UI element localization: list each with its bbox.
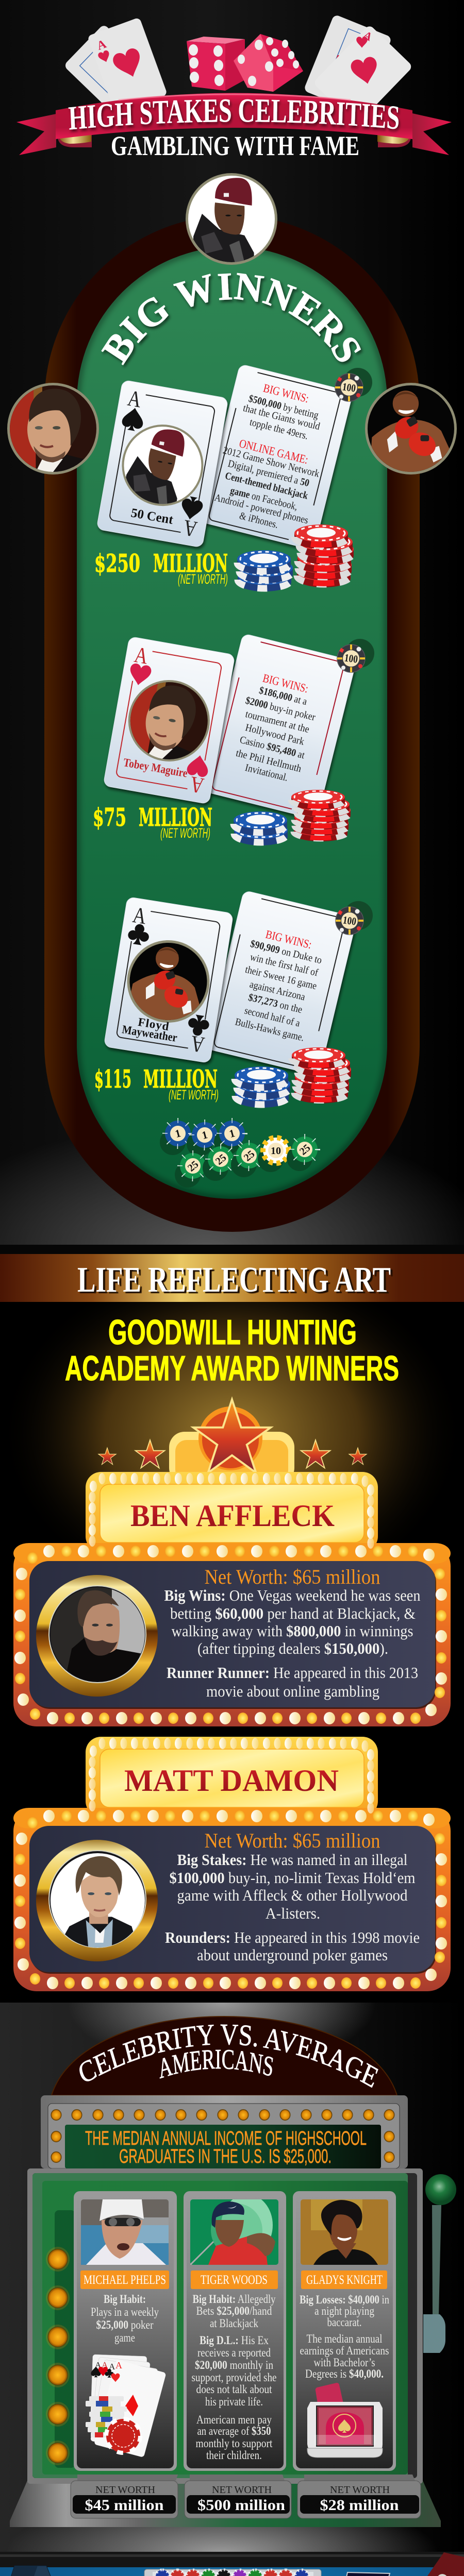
- body text: (after tipping dealers $150,000).: [197, 1639, 388, 1657]
- text: earnings of Americans: [300, 2344, 389, 2357]
- machine base: [10, 2481, 441, 2527]
- card: info: [201, 364, 372, 550]
- card: info: $37,273 on the: [247, 992, 304, 1015]
- plate: Knight net worth: $28 million: [320, 2497, 399, 2514]
- text: Big D.L.: His Ex: [200, 2334, 269, 2347]
- text: with Bachelor’s: [313, 2356, 375, 2369]
- body text: A-listers.: [266, 1904, 320, 1922]
- plate: Woods net worth: [185, 2481, 291, 2518]
- photo: Tiger Woods: [190, 2199, 278, 2265]
- text: his private life.: [205, 2395, 263, 2408]
- title: HIGH STAKES CELEBRITIES: [68, 99, 401, 134]
- body text: game with Affleck & other Hollywood: [177, 1886, 408, 1904]
- text: receives a reported: [197, 2346, 271, 2359]
- card: ace of hearts: A: [188, 771, 206, 799]
- net worth plates: [71, 2475, 421, 2518]
- banner ribbon: [16, 93, 452, 155]
- card: info: $2000 buy-in poker: [244, 695, 317, 723]
- text: $25,000 poker: [96, 2318, 154, 2331]
- portrait: Ben Affleck: [51, 1587, 145, 1682]
- panel: 50 Cent cards: [94, 364, 372, 591]
- chip stacks: [237, 524, 354, 591]
- icon: discard holder: [3, 2566, 61, 2576]
- text: Plays in a weekly: [91, 2306, 159, 2318]
- name: [191, 2270, 278, 2289]
- card: info: the Phil Hellmuth: [235, 748, 303, 774]
- body text: [164, 1586, 421, 1700]
- text: Bets $25,000/hand: [196, 2304, 272, 2317]
- card: info: topple the 49ers.: [248, 416, 309, 442]
- card: ace of clubs: Mayweather: [121, 1023, 178, 1044]
- card: ace of spades: A: [126, 385, 143, 413]
- card: ace of clubs: Floyd: [137, 1015, 170, 1033]
- card: ace of clubs: A: [131, 902, 148, 929]
- chip: 100: [337, 639, 374, 672]
- body text: [165, 1851, 420, 1964]
- heading: Celebrity vs. Average Americans: CELEBRITY VS. AVERAGE: [79, 2024, 378, 2088]
- net worth: $115 million: MILLION: [143, 1065, 218, 1094]
- card: info: BIG WINS:: [262, 381, 310, 405]
- photo: Michael Phelps: [81, 2199, 169, 2265]
- text: [300, 2293, 389, 2380]
- text: an average of $350: [197, 2425, 271, 2437]
- sign: table limits: [338, 2572, 390, 2576]
- card: info: Digital, premiered a 50: [227, 458, 310, 489]
- plate: Knight net worth: [297, 2481, 421, 2518]
- plate: Phelps net worth: [71, 2481, 178, 2518]
- net worth: $75 million: $75: [93, 803, 126, 832]
- card: info: Cent-themed blackjack: [224, 470, 309, 502]
- card: info: against Arizona: [248, 978, 306, 1003]
- icon: left playing cards: [63, 17, 168, 123]
- chip stacks: [235, 1047, 351, 1108]
- machine top: [41, 2095, 408, 2168]
- card: info: 2012 Game Show Network: [222, 445, 321, 480]
- icon: right playing cards: [303, 14, 413, 125]
- card: info: [206, 890, 373, 1076]
- heading: Goodwill Hunting: GOODWILL HUNTING: [108, 1313, 357, 1352]
- body text: walking away with $800,000 in winnings: [171, 1622, 413, 1640]
- icon: big star: [193, 1399, 271, 1473]
- plate: Phelps net worth: $45 million: [85, 2497, 164, 2514]
- band: Life Reflecting Art: [0, 1254, 464, 1302]
- icon: cards and chips: A: [115, 2360, 122, 2370]
- body text: about underground poker games: [197, 1946, 388, 1964]
- text: does not talk about: [196, 2383, 272, 2396]
- heading: Celebrity vs. Average Americans: AMERICANS: [160, 2049, 273, 2079]
- card: info: Invitational.: [244, 762, 289, 784]
- body text: $100,000 buy-in, no-limit Texas Hold‘em: [169, 1869, 416, 1887]
- card: info: BIG WINS:: [261, 671, 310, 696]
- body text: Runner Runner: He appeared in this 2013: [167, 1664, 418, 1682]
- background: casino table: [0, 2552, 464, 2576]
- icon: cards and chips: A: [109, 2362, 115, 2371]
- icon: right playing cards: A: [361, 28, 375, 43]
- net worth: $75 million: (NET WORTH): [160, 825, 210, 841]
- net worth: $115 million: (NET WORTH): [169, 1087, 219, 1103]
- text: support, provided she: [192, 2371, 276, 2384]
- text: The median annual: [306, 2332, 383, 2345]
- card: info: game on Facebook,: [229, 485, 299, 513]
- card: ace of hearts: A: [132, 642, 150, 669]
- icon: left playing cards: A: [95, 37, 108, 53]
- card: info: [204, 633, 374, 820]
- net worth: $115 million: [94, 1065, 219, 1103]
- name: GLADYS KNIGHT: [306, 2273, 383, 2287]
- card: ace of clubs: [104, 897, 234, 1063]
- body text: Big Wins: One Vegas weekend he was seen: [164, 1586, 421, 1604]
- portrait: Matt Damon: [51, 1853, 145, 1947]
- card: info: win the first half of: [249, 952, 319, 979]
- text: [192, 2293, 276, 2462]
- text: Big Habit: Allegedly: [193, 2293, 276, 2306]
- chip: 100: [336, 901, 373, 935]
- body text: Rounders: He appeared in this 1998 movie: [165, 1928, 420, 1946]
- card: ace of spades: [96, 380, 228, 548]
- card: info: & iPhones.: [238, 510, 279, 531]
- chip columns: [156, 2570, 308, 2576]
- icon: small stars: [98, 1440, 367, 1468]
- portrait: Floyd Mayweather: [365, 383, 457, 474]
- icon: card box: [307, 2383, 383, 2458]
- plate: Knight net worth: NET WORTH: [330, 2484, 390, 2496]
- plate: Woods net worth: $500 million: [197, 2497, 285, 2514]
- name: MICHAEL PHELPS: [84, 2273, 166, 2287]
- name: MATT DAMON: [124, 1764, 339, 1798]
- panel: Ben Affleck marquee: [13, 1472, 451, 1726]
- card: ace of hearts: Tobey Maguire: [122, 756, 189, 780]
- text: monthly to support: [196, 2437, 273, 2450]
- text: a night playing: [314, 2304, 374, 2317]
- reel: Michael Phelps: [74, 2191, 177, 2471]
- panel: Tobey Maguire cards: [93, 633, 374, 845]
- text: at Blackjack: [210, 2317, 258, 2330]
- table chips: [160, 1121, 318, 1188]
- card: info: tournament at the: [244, 708, 310, 735]
- icon: pink dice: [187, 34, 303, 92]
- icon: cards and chips: A: [95, 2360, 102, 2370]
- reel: Gladys Knight: [293, 2191, 396, 2471]
- name: BEN AFFLECK: [130, 1499, 335, 1533]
- chip tray: [144, 2569, 321, 2576]
- card: info: their Sweet 16 game: [244, 964, 318, 992]
- card: ace of spades: A: [181, 515, 199, 542]
- panel: poker table: [44, 215, 420, 1232]
- net worth: Net Worth: $65 million: [204, 1829, 380, 1852]
- card: info: BIG WINS:: [264, 928, 313, 951]
- net worth: $250 million: (NET WORTH): [178, 571, 228, 587]
- portrait: Tobey Maguire: [7, 383, 99, 474]
- card: ace of clubs: A: [189, 1031, 206, 1058]
- text: Degrees is $40,000.: [305, 2367, 384, 2380]
- body text: movie about online gambling: [206, 1682, 379, 1700]
- arch: [52, 2016, 397, 2095]
- net worth: Net Worth: $65 million: [204, 1565, 380, 1588]
- name: [301, 2270, 387, 2289]
- chip: 100: [335, 368, 372, 401]
- heading: Big Winners: BIG WINNERS: [101, 273, 364, 368]
- text: Big Habit:: [104, 2293, 146, 2306]
- card: info: Android - powered phones: [213, 492, 310, 526]
- background: section two: [0, 1254, 464, 2003]
- card: info: that the Giants would: [242, 402, 321, 432]
- net worth: $250 million: $250: [94, 549, 140, 578]
- text: [91, 2293, 159, 2344]
- net worth: $250 million: [94, 549, 228, 587]
- card: info: Hollywood Park: [244, 722, 305, 748]
- background: section three: [0, 2003, 432, 2552]
- body text: Big Stakes: He was named in an illegal: [177, 1851, 407, 1869]
- body text: betting $60,000 per hand at Blackjack, &: [170, 1604, 416, 1622]
- card: info: $90,909 on Duke to: [249, 938, 323, 966]
- icon: card shoe: [394, 2552, 464, 2576]
- text: game: [114, 2331, 135, 2344]
- name: TIGER WOODS: [201, 2273, 268, 2287]
- sign top with stars: [98, 1399, 367, 1483]
- card: info: $500,000 by betting: [247, 393, 320, 421]
- text: baccarat.: [327, 2316, 362, 2329]
- net worth: $115 million: $115: [94, 1065, 131, 1094]
- header illustration: cards and dice: [63, 14, 413, 125]
- subtitle: GAMBLING WITH FAME: [111, 130, 359, 161]
- text: American men pay: [196, 2413, 272, 2426]
- name: [80, 2270, 169, 2289]
- icon: cards and chips: A: [102, 2360, 108, 2370]
- plate: Woods net worth: NET WORTH: [212, 2484, 272, 2496]
- portrait: 50 Cent: [186, 173, 277, 265]
- icon: cards and chips: [86, 2354, 167, 2458]
- background: section one: [0, 0, 464, 1370]
- chip stacks: [234, 790, 351, 845]
- net worth: $250 million: MILLION: [153, 549, 228, 578]
- reel: Tiger Woods: [184, 2191, 286, 2471]
- slot machine: [10, 2016, 456, 2527]
- photo: Gladys Knight: [301, 2199, 388, 2265]
- panel: Matt Damon marquee: [13, 1737, 451, 1991]
- panel: Floyd Mayweather cards: [94, 890, 373, 1108]
- card: ace of hearts: [103, 636, 235, 804]
- card: info: Bulls-Hawks game.: [234, 1016, 305, 1044]
- panel: median income: GRADUATES IN THE U.S. IS $25,000.: [119, 2146, 332, 2167]
- panel: median income: [65, 2125, 381, 2168]
- card: info: second half of a: [243, 1005, 301, 1029]
- card: info: Casino $95,480 at: [239, 734, 306, 761]
- net worth: $75 million: [93, 803, 212, 841]
- text: $20,000 monthly in: [195, 2359, 273, 2371]
- card: info: ONLINE GAME:: [238, 437, 309, 466]
- card: ace of spades: 50 Cent: [130, 506, 175, 527]
- machine body: [27, 2168, 423, 2484]
- text: their children.: [206, 2449, 262, 2462]
- plate: Phelps net worth: NET WORTH: [95, 2484, 155, 2496]
- lever: [423, 2174, 456, 2353]
- card: info: $186,000 at a: [258, 685, 308, 707]
- text: Big Losses: $40,000 in: [300, 2293, 389, 2306]
- net worth: $75 million: MILLION: [139, 803, 212, 832]
- heading: Goodwill Hunting: [65, 1313, 399, 1388]
